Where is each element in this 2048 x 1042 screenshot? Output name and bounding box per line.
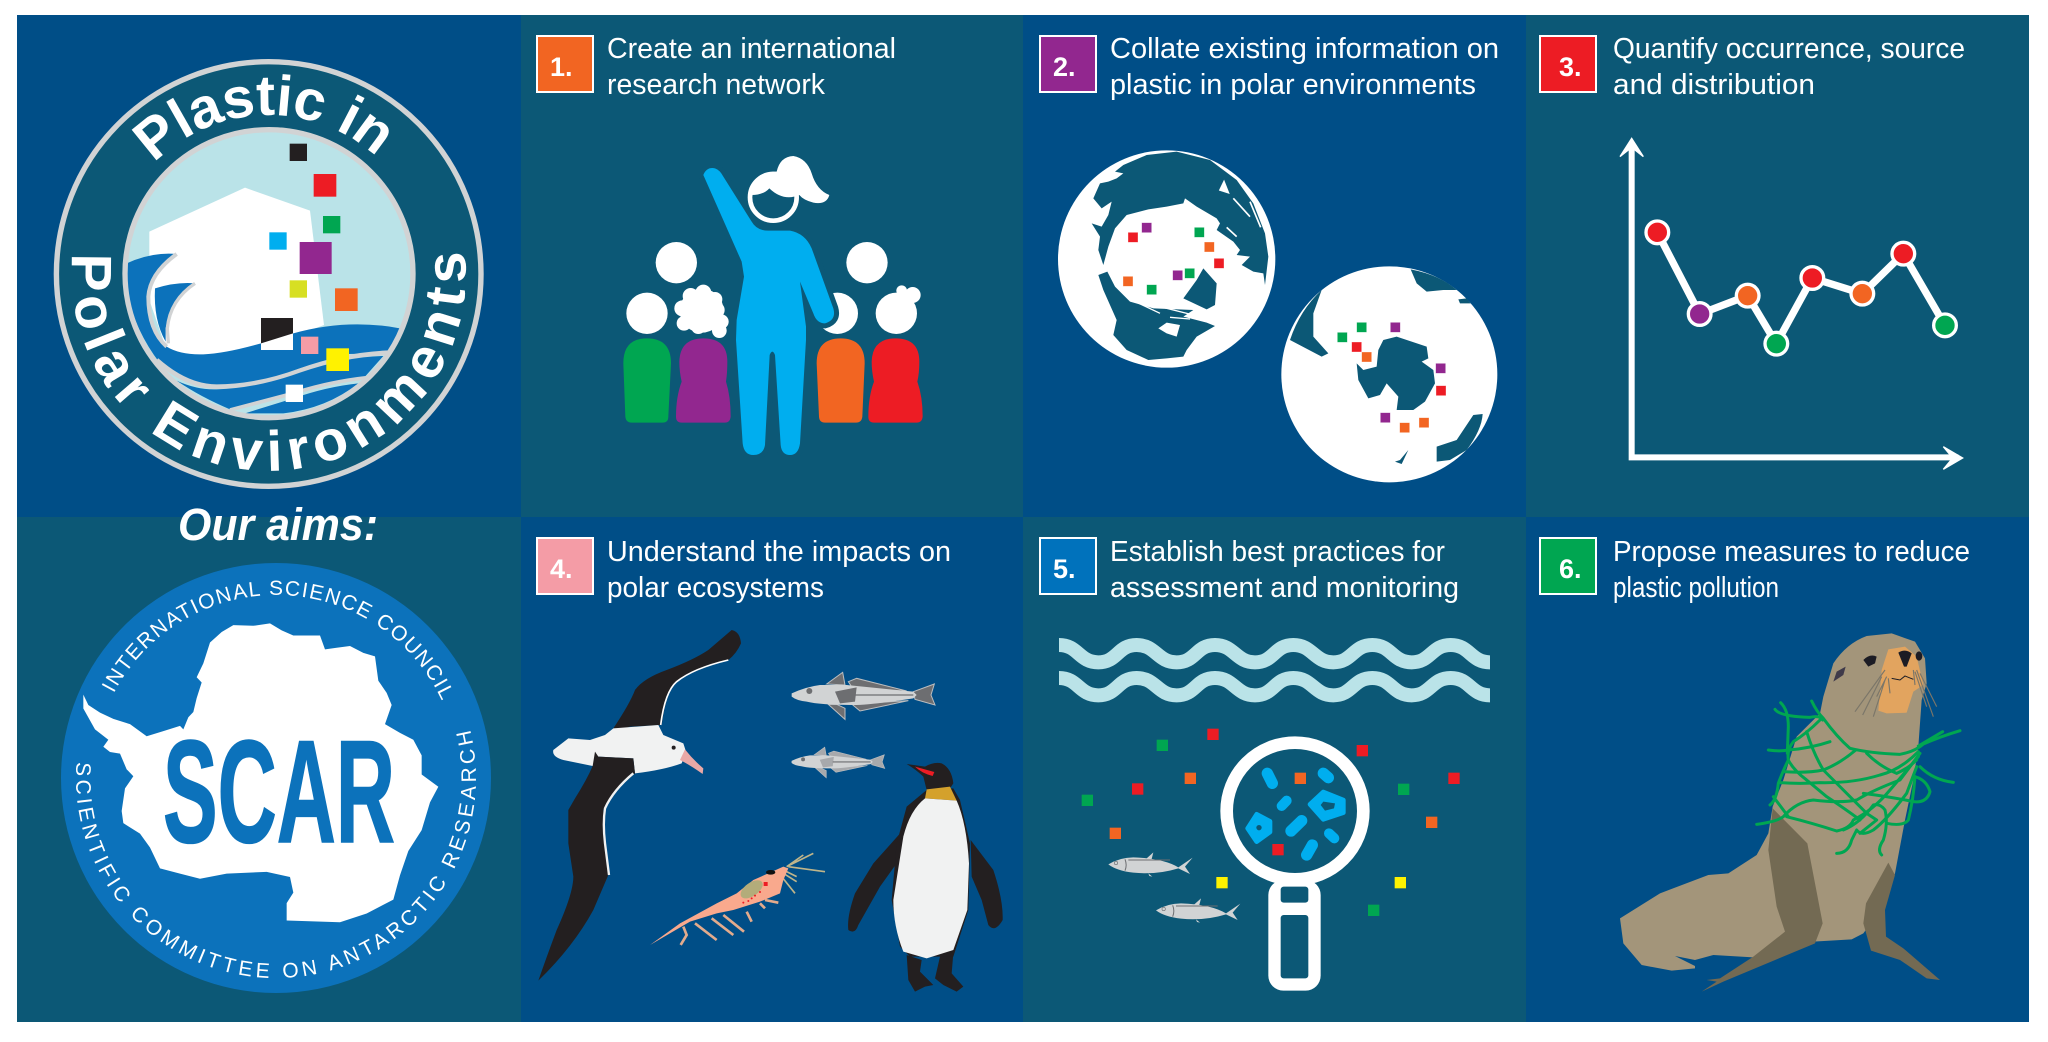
panel: aim 4 background — [521, 517, 1023, 1022]
y axis arrow — [1620, 138, 1643, 157]
aim 5 text: Establish best practices for — [1110, 536, 1445, 568]
logo title top: Plastic in — [132, 74, 389, 160]
polar wildlife — [538, 630, 1003, 992]
panel: SCAR background — [17, 517, 521, 1022]
logo scene — [123, 130, 413, 418]
logo ring — [56, 62, 481, 486]
data line — [1657, 232, 1945, 344]
SCAR ring text bottom: SCIENTIFIC COMMITTEE ON ANTARCTIC RESEARCH — [76, 731, 476, 978]
aim 6 text: Propose measures to reduce — [1613, 536, 1970, 568]
fish large — [792, 672, 935, 719]
number badge 3 — [1540, 36, 1596, 92]
globe: Antarctic — [1281, 266, 1497, 482]
number 5: 5. — [1053, 554, 1076, 584]
number 6: 6. — [1559, 554, 1582, 584]
aim 1 text: research network — [607, 69, 826, 101]
number 1: 1. — [550, 52, 573, 82]
number badge 2 — [1040, 36, 1096, 92]
magnifying glass — [1227, 743, 1363, 991]
globes with plastic sites — [1058, 150, 1497, 482]
logo: Plastic in Polar Environments — [54, 59, 484, 489]
aim 1 text: Create an international — [607, 33, 896, 65]
seal body — [1620, 633, 1927, 971]
aim 3 text: Quantify occurrence, source — [1613, 33, 1965, 65]
aim 2 text: plastic in polar environments — [1110, 69, 1476, 101]
panel: aim 6 background — [1526, 517, 2029, 1022]
number badge 4 — [537, 538, 593, 594]
aim 4 text: polar ecosystems — [607, 572, 824, 604]
number 3: 3. — [1559, 52, 1582, 82]
small fish one — [1108, 852, 1193, 877]
fishing net — [1757, 701, 1960, 855]
water waves — [1059, 645, 1490, 695]
panel: logo background — [17, 15, 521, 517]
SCAR wordmark: SCAR — [163, 710, 395, 873]
seal face — [1833, 647, 1937, 717]
panel: aim 5 background — [1023, 517, 1526, 1022]
data points — [1646, 221, 1956, 355]
number badge 5 — [1040, 538, 1096, 594]
logo plastic squares — [261, 144, 358, 402]
krill — [650, 853, 825, 945]
aim 5 text: assessment and monitoring — [1110, 572, 1459, 604]
aim 2 text: Collate existing information on — [1110, 33, 1499, 65]
panel: aim 3 background — [1526, 15, 2029, 517]
aim 4 text: Understand the impacts on — [607, 536, 951, 568]
number badge 6 — [1540, 538, 1596, 594]
seal flippers — [1702, 808, 1940, 992]
icon: research network people — [623, 156, 923, 455]
monitoring scene — [1059, 645, 1490, 991]
panel: aim 1 background — [521, 15, 1023, 517]
heading: Our aims: Our aims: — [178, 499, 378, 550]
x axis arrow — [1943, 447, 1963, 469]
plastic site markers — [1123, 223, 1446, 433]
small fish two — [1156, 898, 1240, 923]
aim 3 header — [1540, 33, 1965, 101]
microplastic fragments — [1248, 773, 1343, 855]
logo title bottom: Polar Environments — [72, 254, 466, 471]
aim 4 header — [537, 536, 951, 604]
aim 2 header — [1040, 33, 1499, 101]
aim 3 text: and distribution — [1613, 69, 1815, 101]
penguin — [848, 763, 1003, 992]
aim 5 header — [1040, 536, 1459, 604]
globe: Arctic — [1058, 150, 1275, 368]
aim 6 header — [1540, 536, 1970, 604]
albatross — [538, 630, 741, 981]
line chart — [1620, 138, 1963, 469]
aim 6 text: plastic pollution — [1613, 572, 1779, 604]
fish small — [792, 747, 885, 778]
number 2: 2. — [1053, 52, 1076, 82]
logo: SCAR — [61, 563, 491, 993]
SCAR disc — [61, 563, 491, 993]
number badge 1 — [537, 36, 593, 92]
plastic squares — [1082, 729, 1460, 916]
SCAR ring text top: INTERNATIONAL SCIENCE COUNCIL — [102, 580, 452, 700]
number 4: 4. — [550, 554, 573, 584]
panel: aim 2 background — [1023, 15, 1526, 517]
map of Antarctica — [83, 623, 438, 922]
aim 1 header — [537, 33, 896, 101]
seal entangled in net — [1620, 633, 1960, 992]
chart axes — [1632, 143, 1958, 457]
